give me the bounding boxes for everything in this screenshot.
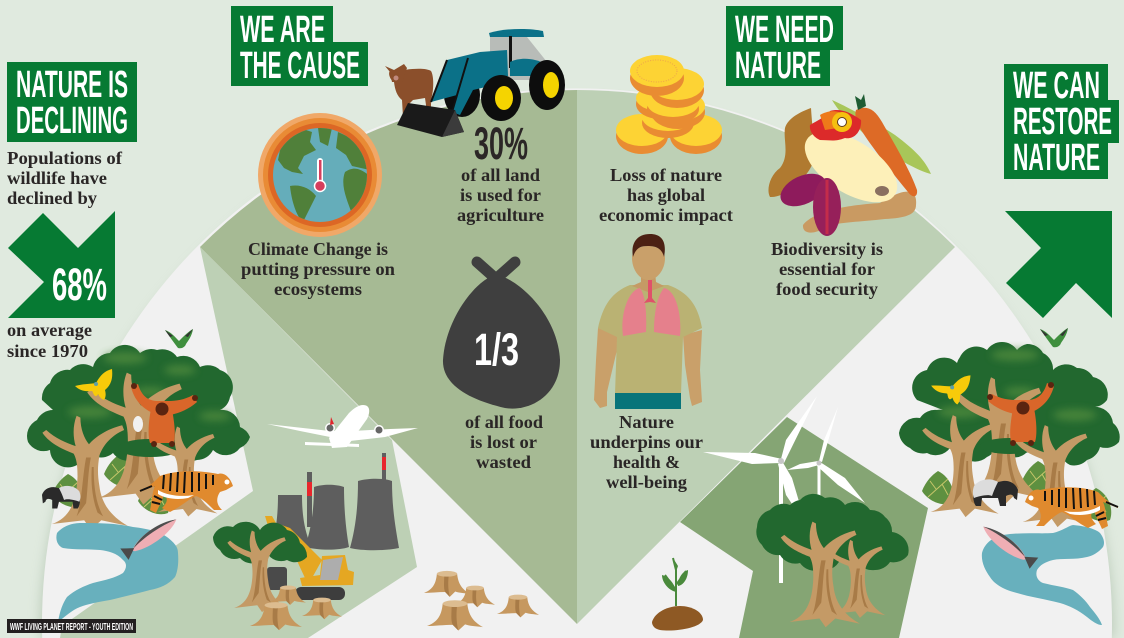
icon: rubbish bag with one third: 1/3 <box>474 324 519 375</box>
text: land used for agriculture <box>457 165 544 225</box>
text: climate change: putting pressure on <box>241 259 395 279</box>
icon: right canopy highlights <box>938 349 1097 421</box>
text: loss of nature: Loss of nature <box>610 165 722 185</box>
icon: sapling <box>652 558 703 631</box>
icon: yellow macaw right <box>929 369 971 406</box>
icon: right forest trunks <box>922 377 1091 527</box>
text: climate change: Climate Change is <box>248 239 388 259</box>
icon: tapir <box>42 486 80 508</box>
text: populations of wildlife: declined by <box>7 188 97 208</box>
text: nature underpins health: health & <box>613 452 680 472</box>
icon: left forest trunks <box>42 373 218 530</box>
text: biodiversity <box>771 239 883 299</box>
icon: ground leaves left <box>52 454 169 514</box>
text: food lost or wasted: wasted <box>476 452 531 472</box>
footer: report credit: WWF LIVING PLANET REPORT - YOUTH EDITION <box>10 621 133 633</box>
icon: stumps in clearing <box>424 571 539 630</box>
text: biodiversity: Biodiversity is <box>771 239 883 259</box>
icon: tiger <box>140 471 233 513</box>
heading: we are the cause <box>231 6 368 87</box>
icon: power station <box>272 453 399 550</box>
icon: ground leaves right <box>922 461 1111 521</box>
icon: orangutan right <box>987 382 1054 446</box>
icon: green parrot <box>165 329 193 348</box>
heading: nature is declining: DECLINING <box>16 100 128 142</box>
text: nature underpins health: well-being <box>606 472 687 492</box>
text: nature underpins health: Nature <box>619 412 674 432</box>
icon: cow <box>385 64 433 117</box>
icon: orangutan <box>131 383 198 447</box>
heading: we are the cause: THE CAUSE <box>240 45 360 87</box>
icon: green parrot right <box>1040 328 1068 347</box>
illustration: left forest <box>27 329 250 622</box>
text: populations of wildlife <box>7 148 123 208</box>
panel: we are the cause light segment <box>60 247 417 638</box>
text: loss of nature <box>599 165 733 225</box>
footer: report credit <box>7 619 136 633</box>
arrow: up <box>1005 211 1112 318</box>
text: land used for agriculture: is used for <box>460 185 541 205</box>
icon: excavator <box>265 516 354 600</box>
text: food lost or wasted <box>465 412 543 472</box>
text: climate change: ecosystems <box>274 279 362 299</box>
text: on average since 1970 <box>7 320 92 361</box>
icon: wind turbines <box>703 396 865 583</box>
text: nature underpins health: underpins our <box>590 432 703 452</box>
heading: we are the cause: WE ARE <box>240 9 325 51</box>
text: populations of wildlife: Populations of <box>7 148 123 168</box>
text: on average since 1970: on average <box>7 320 92 340</box>
icon: yellow macaw <box>75 369 112 400</box>
text: land used for agriculture: agriculture <box>457 205 544 225</box>
icon: airplane <box>267 405 418 448</box>
icon: restored trees <box>756 494 909 627</box>
text: nature underpins health <box>590 412 703 492</box>
panel: restoration segment <box>680 417 928 638</box>
text: food lost or wasted: of all food <box>465 412 543 432</box>
icon: left forest canopy <box>27 345 250 467</box>
icon: tractor with bucket <box>397 29 565 137</box>
illustration: right forest <box>899 328 1120 625</box>
arrow: down with 68 percent <box>8 211 115 318</box>
icon: gold coins <box>616 55 722 154</box>
text: on average since 1970: since 1970 <box>7 341 88 361</box>
icon: river right <box>982 525 1104 625</box>
panel: we need nature segment <box>577 90 955 624</box>
icon: rubbish bag with one third <box>443 262 560 409</box>
icon: felled tree <box>213 522 307 612</box>
panel: we are the cause dark segment <box>200 90 577 624</box>
heading: we need nature: NATURE <box>735 45 821 87</box>
heading: nature is declining <box>7 62 137 142</box>
text: biodiversity: food security <box>776 279 878 299</box>
icon: stumps by excavator <box>250 585 342 630</box>
text: land used for agriculture: of all land <box>461 165 540 185</box>
arrow: down with 68 percent: 68% <box>52 259 107 310</box>
heading: nature is declining: NATURE IS <box>16 64 128 106</box>
text: loss of nature: economic impact <box>599 205 733 225</box>
icon: salmon right <box>978 522 1038 569</box>
text: biodiversity: essential for <box>779 259 875 279</box>
icon: salmon <box>120 515 181 560</box>
text: loss of nature: has global <box>627 185 705 205</box>
icon: canopy highlights <box>68 352 231 421</box>
icon: right forest canopy <box>899 342 1120 465</box>
heading: we can restore nature <box>1004 64 1119 179</box>
icon: food crops <box>768 94 931 236</box>
text: populations of wildlife: wildlife have <box>7 168 107 188</box>
stat: 30 percent: 30% <box>474 118 528 169</box>
icon: tiger right <box>1025 487 1118 529</box>
heading: we need nature: WE NEED <box>735 9 834 51</box>
icon: globe with thermometer <box>258 113 382 237</box>
icon: tapir right <box>973 479 1018 506</box>
text: climate change <box>241 239 395 299</box>
text: food lost or wasted: is lost or <box>470 432 537 452</box>
icon: river <box>56 523 178 622</box>
heading: we need nature <box>726 6 843 87</box>
icon: person with lungs <box>594 234 702 409</box>
